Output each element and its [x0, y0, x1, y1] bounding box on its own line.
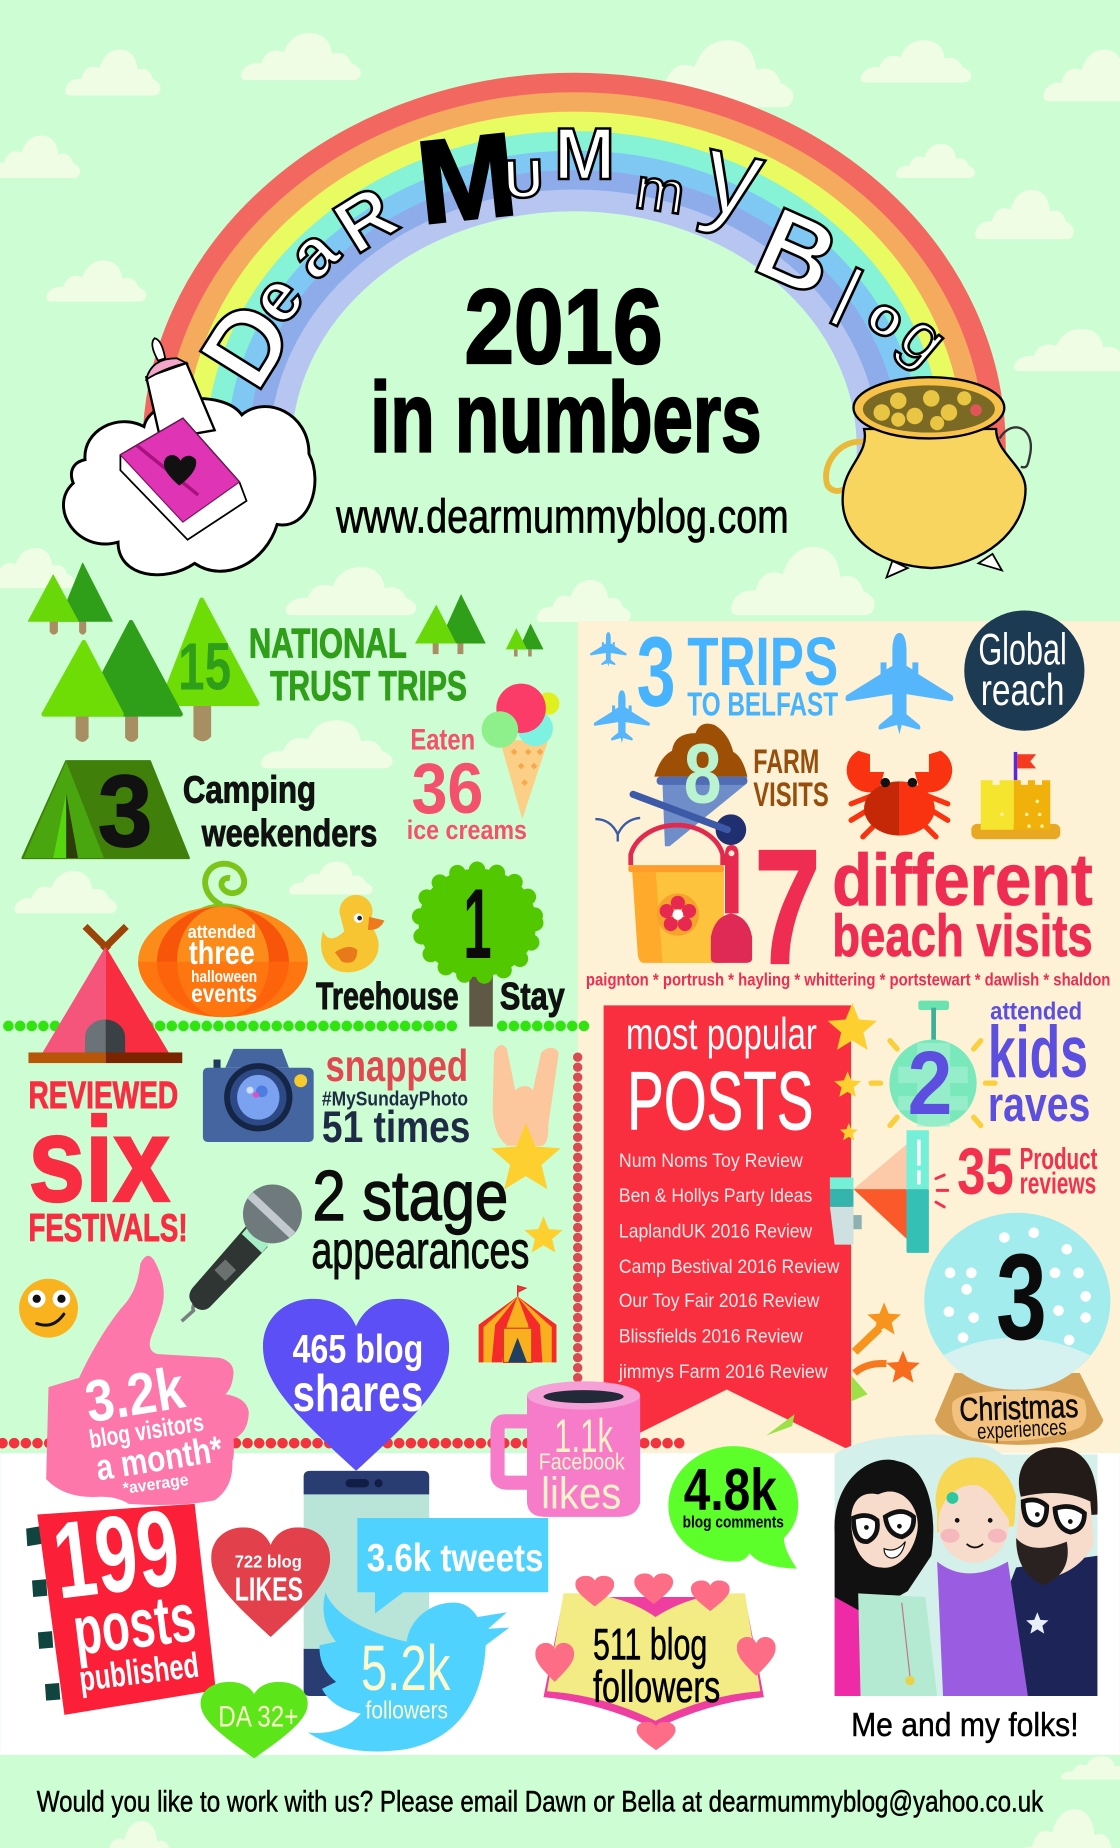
- text: eaten 36 ice creams: [407, 724, 527, 845]
- list of popular posts: Num Noms Toy Review: [619, 1150, 804, 1172]
- label: national trust trips: TRUST TRIPS: [270, 663, 467, 709]
- banner: most popular posts: [604, 1005, 851, 1451]
- thumbs up: 3.2k blog visitors: blog visitors: [87, 1409, 206, 1454]
- notebook: 199 posts published: posts: [69, 1579, 200, 1670]
- thumbs up: 3.2k blog visitors: *average: [122, 1471, 190, 1498]
- icon: shooting stars and paper plane: [766, 1302, 920, 1436]
- label: trips to belfast: TO BELFAST: [687, 685, 838, 722]
- icon: rubber duck: [321, 895, 384, 972]
- icon: megaphone: [830, 1130, 948, 1253]
- badge: global reach: reach: [981, 665, 1064, 715]
- text: 35 product reviews: 35: [957, 1134, 1014, 1208]
- text: reviewed six festivals: FESTIVALS!: [28, 1207, 188, 1250]
- heart: DA 32+: [201, 1682, 308, 1758]
- title: Dear Mummy Blog: M: [554, 114, 615, 195]
- label: trips to belfast: TRIPS: [687, 624, 838, 700]
- list of popular posts: [618, 1150, 840, 1383]
- text: 2 stage appearances: appearances: [311, 1221, 529, 1279]
- text: farm visits: VISITS: [753, 776, 829, 814]
- figure: mum: [835, 1460, 937, 1696]
- list of popular posts: Camp Bestival 2016 Review: [619, 1256, 840, 1278]
- number: 7: 7: [754, 817, 820, 998]
- text: 35 product reviews: [957, 1134, 1097, 1208]
- figure: man: [967, 1447, 1098, 1696]
- icon: wheelbarrow with 8 farm visits: [633, 724, 747, 846]
- text: treehouse stay: Stay: [500, 975, 565, 1017]
- label: national trust trips: [249, 621, 467, 709]
- list of popular posts: LaplandUK 2016 Review: [619, 1220, 813, 1242]
- icon: snow globe with 3 christmas experiences: [924, 1213, 1110, 1445]
- text: farm visits: FARM: [753, 743, 819, 781]
- text: farm visits: [753, 743, 829, 814]
- icon: mug with 1.1k facebook likes: Facebook: [539, 1449, 625, 1475]
- icon: twitter bird with 5.2k followers: 5.2k: [361, 1633, 451, 1704]
- family illustration: [835, 1434, 1098, 1696]
- speech bubble: 4.8k blog comments: blog comments: [683, 1513, 784, 1531]
- icon: open book with hearts: [535, 1573, 776, 1750]
- green dotted divider: [8, 1021, 585, 1030]
- trees: 15 National Trust trips: [28, 563, 543, 742]
- icon: twitter bird with 5.2k followers: [308, 1592, 509, 1752]
- heart: 722 blog likes: LIKES: [235, 1570, 303, 1607]
- icon: small trees right: [415, 594, 544, 656]
- title: Dear Mummy Blog: l: [818, 251, 875, 345]
- icon: mug with 1.1k facebook likes: 1.1k: [554, 1409, 613, 1462]
- icon: bucket and spade: [628, 825, 752, 963]
- text: treehouse stay: Treehouse: [316, 975, 459, 1017]
- text: camping weekenders: [183, 769, 377, 854]
- thumbs up: 3.2k blog visitors: 3.2k: [81, 1355, 189, 1435]
- text: eaten 36 ice creams: ice creams: [407, 814, 527, 845]
- icon: snow globe with 3 christmas experiences: 3: [996, 1228, 1047, 1365]
- icon: twitter bird with 5.2k followers: followers: [366, 1697, 448, 1724]
- icon: pot of gold: [826, 377, 1031, 578]
- title: Dear Mummy Blog: e: [233, 258, 319, 338]
- speech box: 3.6k tweets: 3.6k tweets: [367, 1537, 544, 1580]
- text: reviewed six festivals: REVIEWED: [28, 1074, 178, 1116]
- icon: open book with hearts: 511 blog: [593, 1619, 707, 1669]
- badge: global reach: Global: [978, 625, 1067, 675]
- banner: most popular posts: POSTS: [627, 1055, 813, 1147]
- panel: white social section: [0, 1453, 1120, 1755]
- icon: pumpkin with halloween events: events: [191, 981, 257, 1008]
- banner: most popular posts: most popular: [626, 1009, 817, 1059]
- title: Dear Mummy Blog: a: [273, 212, 354, 293]
- text: camping weekenders: Camping: [183, 769, 316, 811]
- text: different beach visits: [832, 840, 1093, 969]
- icon: phone: [304, 1471, 429, 1696]
- number: 3: 3: [637, 616, 676, 727]
- title: Dear Mummy Blog: y: [693, 108, 775, 243]
- list of popular posts: Ben & Hollys Party Ideas: [619, 1185, 812, 1207]
- title: Dear Mummy Blog: m: [631, 156, 689, 227]
- icon: green tent with number 3: [23, 755, 189, 868]
- thumbs up: 3.2k blog visitors: [46, 1256, 249, 1505]
- text: camping weekenders: weekenders: [201, 812, 377, 854]
- website url: www.dearmummyblog.com: [335, 490, 789, 543]
- icon: circus tent: [479, 1286, 556, 1362]
- icon: pumpkin with halloween events: attended: [188, 921, 256, 942]
- text: snapped my sunday photo 51 times: snapped: [325, 1041, 468, 1091]
- red dotted divider vertical: [574, 1057, 582, 1443]
- text: different beach visits: different: [832, 840, 1093, 921]
- icon: cloud with baby bottle and book: [63, 338, 315, 575]
- notebook: 199 posts published: [26, 1485, 216, 1715]
- speech bubble: 4.8k blog comments: [668, 1446, 798, 1569]
- icon: tree with number 1: 1: [463, 868, 492, 979]
- heart: DA 32+: DA 32+: [218, 1701, 298, 1734]
- icon: small plane bottom: [594, 690, 650, 743]
- badge: global reach: [964, 610, 1084, 731]
- text: reviewed six festivals: six: [28, 1093, 170, 1227]
- number: 15: 15: [178, 629, 231, 704]
- text: snapped my sunday photo 51 times: #MySundayPhoto: [322, 1088, 468, 1110]
- notebook: 199 posts published: 199: [47, 1486, 186, 1622]
- icon: red teepee: [28, 926, 182, 1063]
- icon: open book with hearts: followers: [593, 1662, 720, 1712]
- icon: mug with 1.1k facebook likes: [498, 1381, 640, 1519]
- icon: seagull: [595, 818, 640, 842]
- caption: me and my folks: Me and my folks!: [851, 1706, 1079, 1743]
- speech bubble: 4.8k blog comments: 4.8k: [684, 1458, 777, 1523]
- text: 2 stage appearances: 2 stage: [312, 1156, 508, 1235]
- heart: 465 blog shares: shares: [292, 1364, 423, 1422]
- heart: 722 blog likes: [211, 1527, 330, 1637]
- text: snapped my sunday photo 51 times: 51 times: [322, 1102, 470, 1152]
- icon: rock hand with star: [491, 1045, 561, 1189]
- title: Dear Mummy Blog: U: [503, 149, 544, 210]
- list of popular posts: jimmys Farm 2016 Review: [618, 1361, 828, 1383]
- icon: snow globe with 3 christmas experiences: experiences: [976, 1414, 1067, 1444]
- icon: green tent with number 3: 3: [98, 755, 152, 868]
- icon: mug with 1.1k facebook likes: likes: [541, 1469, 621, 1519]
- stars beside banner: [828, 1003, 877, 1140]
- text: eaten 36 ice creams: Eaten: [410, 724, 475, 757]
- title: Dear Mummy Blog: R: [320, 169, 411, 269]
- icon: small star: [524, 1216, 563, 1253]
- title: Dear Mummy Blog: M: [411, 107, 522, 249]
- icon: pumpkin with halloween events: halloween: [191, 968, 257, 986]
- icon: small pair of trees top left: [28, 563, 112, 635]
- heart: 465 blog shares: 465 blog: [292, 1327, 423, 1371]
- heading: 2016: 2016: [465, 268, 663, 386]
- figure: child: [936, 1457, 1028, 1696]
- icon: camera: [203, 1049, 314, 1142]
- panel: cream travel section: [578, 621, 1120, 1453]
- heart: 722 blog likes: 722 blog: [235, 1551, 302, 1571]
- label: trips to belfast: [687, 624, 838, 722]
- icon: crab: [847, 751, 952, 837]
- icon: disco ball with number 2: [871, 1001, 995, 1133]
- title: Dear Mummy Blog: D: [177, 281, 315, 406]
- icon: snow globe with 3 christmas experiences: Christmas: [959, 1387, 1079, 1428]
- icon: ice cream: [482, 684, 559, 819]
- title: Dear Mummy Blog: B: [741, 186, 854, 319]
- heart: 465 blog shares: [263, 1299, 449, 1471]
- icon: wheelbarrow with 8 farm visits: 8: [684, 726, 721, 821]
- label: national trust trips: NATIONAL: [249, 621, 407, 667]
- text: eaten 36 ice creams: 36: [411, 749, 483, 829]
- icon: smiley face: [19, 1279, 78, 1338]
- red dotted divider horizontal: [3, 1439, 681, 1448]
- icon: sand castle: [971, 752, 1060, 839]
- icon: tree with number 1: [419, 868, 536, 1027]
- text: attended kids raves: [988, 998, 1090, 1132]
- title: Dear Mummy Blog: g: [887, 298, 963, 378]
- text: snapped my sunday photo 51 times: [322, 1041, 470, 1152]
- icon: large plane: [845, 633, 953, 734]
- list of popular posts: Blissfields 2016 Review: [619, 1325, 804, 1347]
- list of popular posts: Our Toy Fair 2016 Review: [619, 1290, 820, 1312]
- icon: pumpkin with halloween events: [138, 864, 308, 1017]
- heading: in numbers: in numbers: [370, 361, 762, 472]
- title: Dear Mummy Blog: o: [857, 283, 916, 352]
- icon: big trees: [44, 600, 257, 742]
- notebook: 199 posts published: published: [77, 1646, 201, 1699]
- text: attended kids raves: attended: [990, 998, 1082, 1025]
- icon: small plane top: [590, 632, 627, 667]
- text: 2 stage appearances: [311, 1156, 529, 1279]
- speech box: 3.6k tweets: [357, 1518, 548, 1613]
- thumbs up: 3.2k blog visitors: a month*: [93, 1428, 226, 1488]
- plane icons and 3 trips to belfast: [590, 616, 953, 743]
- icon: microphone: [182, 1184, 302, 1321]
- text: attended kids raves: raves: [988, 1077, 1090, 1132]
- icon: disco ball with number 2: 2: [908, 1033, 952, 1133]
- rainbow: [153, 84, 995, 495]
- icon: pumpkin with halloween events: three: [189, 934, 255, 971]
